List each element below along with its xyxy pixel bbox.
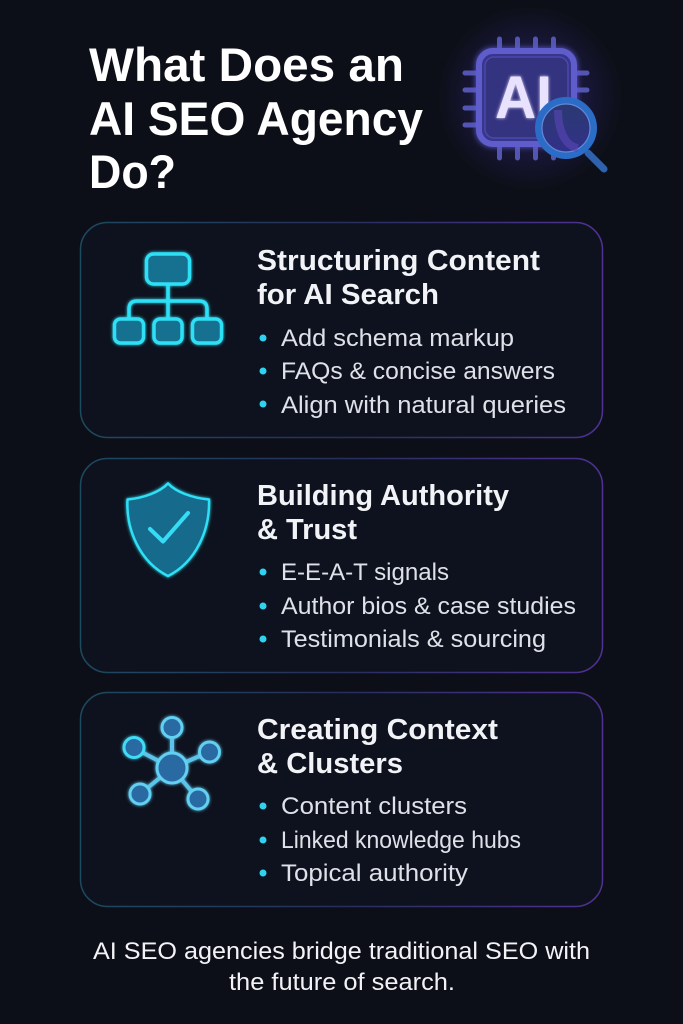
heading: & Trust [257, 514, 357, 546]
title: What Does an [89, 38, 404, 91]
icon: hierarchy [114, 254, 222, 343]
heading: Creating Context [257, 714, 498, 746]
panel: authority and trust [80, 458, 602, 672]
bullet list: FAQs & concise answers [281, 358, 555, 385]
panel: context and clusters [80, 692, 602, 906]
bullet list: Content clusters [281, 793, 467, 820]
heading: & Clusters [257, 748, 403, 780]
icon: shield with check [127, 484, 209, 576]
bullet list [260, 793, 521, 887]
heading [257, 245, 540, 311]
bullet list: Linked knowledge hubs [281, 827, 521, 854]
panel: structuring content [80, 222, 602, 438]
bullet list [260, 325, 566, 419]
footer text [93, 938, 590, 996]
heading: Structuring Content [257, 245, 540, 277]
title [89, 38, 423, 198]
icon: network [124, 718, 220, 809]
title: Do? [89, 145, 176, 198]
icon: AI chip with magnifier: AI [495, 64, 552, 131]
bullet list: E-E-A-T signals [281, 559, 449, 586]
footer text: the future of search. [229, 969, 455, 996]
title: AI SEO Agency [89, 92, 423, 145]
bullet list: Add schema markup [281, 325, 514, 352]
bullet list [260, 559, 576, 653]
bullet list: Testimonials & sourcing [281, 626, 546, 653]
bullet list: Author bios & case studies [281, 593, 576, 620]
heading [257, 480, 509, 546]
footer text: AI SEO agencies bridge traditional SEO with [93, 938, 590, 965]
icon: AI chip with magnifier [438, 6, 622, 190]
bullet list: Topical authority [281, 860, 468, 887]
heading: for AI Search [257, 279, 439, 311]
heading [257, 714, 498, 780]
heading: Building Authority [257, 480, 509, 512]
bullet list: Align with natural queries [281, 392, 566, 419]
